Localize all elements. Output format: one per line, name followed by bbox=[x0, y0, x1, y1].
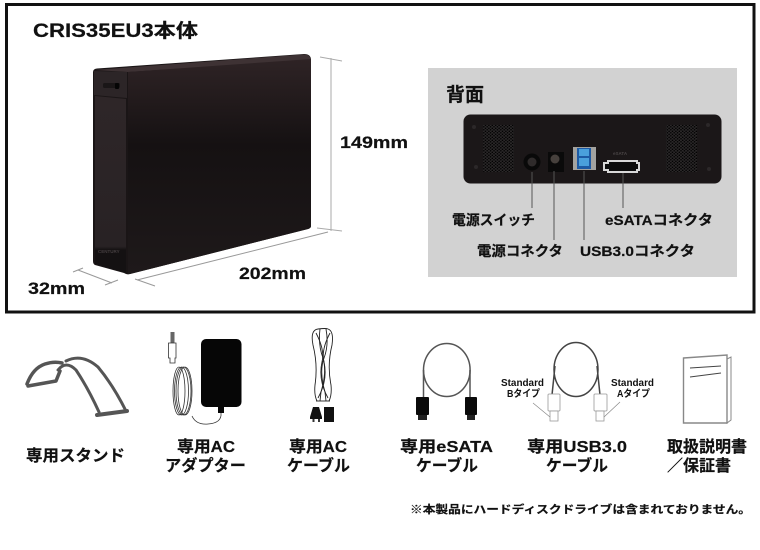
dimension: height 149mm: 149mm bbox=[340, 133, 408, 152]
panel: main unit frame bbox=[6, 4, 754, 312]
icon: eSATA cable bbox=[416, 344, 477, 420]
caption: stand: 専用スタンド bbox=[26, 446, 125, 465]
title: CRIS35EU3本体 bbox=[33, 20, 198, 42]
label: Standard A type: Aタイプ bbox=[617, 388, 650, 400]
label: Standard B type: Standard bbox=[501, 378, 544, 389]
icon: stand bbox=[27, 358, 127, 415]
dimension: depth 202mm: 202mm bbox=[239, 264, 306, 283]
label: Standard A type bbox=[611, 378, 654, 400]
caption: AC cable: 専用AC bbox=[289, 437, 347, 456]
caption: eSATA cable bbox=[400, 437, 493, 475]
dimension: width 32mm bbox=[28, 268, 118, 298]
caption: USB 3.0 cable bbox=[527, 437, 627, 475]
device: rear panel bbox=[464, 114, 722, 184]
device: enclosure front view bbox=[93, 54, 311, 274]
label: USB 3.0 connector: USB3.0コネクタ bbox=[580, 243, 695, 259]
icon: USB 3.0 cable bbox=[533, 342, 620, 421]
note: hard disk not included: ※本製品にハードディスクドライブは含まれておりません。 bbox=[410, 502, 751, 516]
device: enclosure front view: CENTURY bbox=[98, 249, 120, 254]
caption: manual and warranty bbox=[667, 437, 747, 475]
label: Standard B type: Bタイプ bbox=[507, 388, 540, 400]
caption: USB 3.0 cable: 専用USB3.0 bbox=[527, 437, 627, 456]
caption: AC cable: ケーブル bbox=[287, 456, 350, 475]
connector leader lines bbox=[532, 171, 623, 240]
label: eSATA connector: eSATAコネクタ bbox=[605, 212, 713, 228]
label: power connector: 電源コネクタ bbox=[477, 243, 563, 259]
caption: eSATA cable: ケーブル bbox=[416, 456, 478, 475]
caption: AC adapter bbox=[165, 437, 246, 475]
device: rear panel: eSATA bbox=[613, 151, 628, 156]
label: Standard A type: Standard bbox=[611, 378, 654, 389]
caption: manual and warranty: 取扱説明書 bbox=[667, 437, 747, 456]
panel: rear view bbox=[428, 68, 737, 277]
icon: AC cable bbox=[310, 328, 334, 422]
dimension: width 32mm: 32mm bbox=[28, 279, 85, 298]
label: power switch: 電源スイッチ bbox=[452, 212, 535, 228]
caption: eSATA cable: 専用eSATA bbox=[400, 437, 493, 456]
icon: manual and warranty bbox=[684, 355, 731, 423]
caption: USB 3.0 cable: ケーブル bbox=[546, 456, 608, 475]
caption: AC adapter: アダプター bbox=[165, 456, 246, 475]
caption: manual and warranty: ／保証書 bbox=[667, 456, 731, 475]
label: Standard B type bbox=[501, 378, 544, 400]
dimension: height 149mm bbox=[317, 57, 408, 231]
caption: AC cable bbox=[287, 437, 350, 475]
caption: AC adapter: 専用AC bbox=[177, 437, 235, 456]
dimension: depth 202mm bbox=[135, 232, 328, 286]
rear heading: 背面 bbox=[446, 84, 484, 106]
icon: AC adapter bbox=[168, 332, 242, 424]
